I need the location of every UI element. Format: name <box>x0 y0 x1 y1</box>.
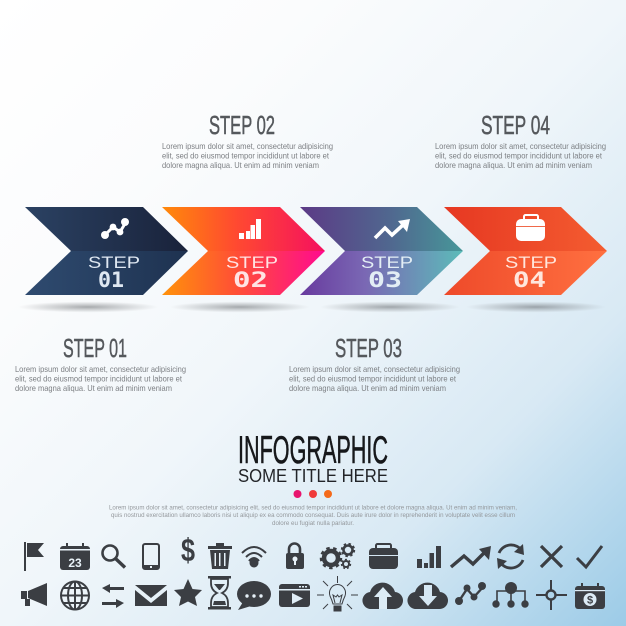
icon: sync <box>497 544 524 569</box>
icon: video window <box>279 584 310 607</box>
text block: step 03: STEP 03 <box>335 333 402 363</box>
icon: calendar <box>60 543 90 570</box>
icon row 2 <box>21 576 605 611</box>
subtitle: SOME TITLE HERE <box>238 466 388 486</box>
icon: close <box>541 546 562 567</box>
text block: step 04 <box>435 110 606 170</box>
step 01 chevron <box>25 207 188 295</box>
text block: step 02: STEP 02 <box>209 110 275 140</box>
step 02 chevron <box>162 207 325 295</box>
icon: trend arrow <box>451 546 491 567</box>
text block: step 02 <box>162 110 333 170</box>
icon: star <box>174 579 202 606</box>
text block: step 01: Lorem ipsum dolor sit amet, consectetur adipisicing <box>15 364 186 374</box>
icon: light bulb <box>317 576 358 611</box>
icon: cloud upload <box>362 583 403 609</box>
text block: step 01: dolore magna aliqua. Ut enim ad minim veniam <box>15 383 172 393</box>
text block: step 04: Lorem ipsum dolor sit amet, consectetur adipisicing <box>435 141 606 151</box>
icon: signal bars <box>417 546 441 568</box>
step 03 label <box>361 253 413 292</box>
text block: step 02: Lorem ipsum dolor sit amet, consectetur adipisicing <box>162 141 333 151</box>
text block: step 04: dolore magna aliqua. Ut enim ad minim veniam <box>435 160 592 170</box>
text block: step 04: elit, sed do eiusmod tempor incididunt ut labore et <box>435 150 603 160</box>
icon: hourglass <box>208 576 231 610</box>
step 02 label: 02 <box>233 268 268 292</box>
icon: line nodes <box>455 582 486 605</box>
step 04 label: STEP <box>505 253 557 272</box>
text block: step 02: elit, sed do eiusmod tempor incididunt ut labore et <box>162 150 330 160</box>
icon: line nodes <box>101 218 129 239</box>
step 01 label <box>88 253 140 292</box>
icon: dollar: $ <box>181 532 195 568</box>
description text: Lorem ipsum dolor sit amet, consectetur adipisicing elit, sed do eiusmod tempor incididunt ut labore et dolore magna aliqua. Ut enim ad minim veniam, <box>109 504 517 512</box>
icon: crosshair <box>536 580 567 610</box>
icon: calendar: 23 <box>68 556 82 570</box>
step 03 label: STEP <box>361 253 413 272</box>
step 03 label: 03 <box>368 268 402 292</box>
icon: globe <box>61 581 89 610</box>
icon: briefcase <box>516 215 545 241</box>
icon row 1 <box>24 532 602 571</box>
description text: dolore eu fugiat nulla pariatur. <box>272 520 354 527</box>
title: INFOGRAPHIC <box>238 429 388 472</box>
step 02 label: STEP <box>226 253 278 272</box>
icon: lock <box>286 544 304 569</box>
description text: quis nostrud exercitation ullamco laboris nisi ut aliquip ex ea commodo consequat. Duis aute irure dolor in reprehenderit in voluptate velit esse cillum <box>111 512 515 519</box>
step 01 label: 01 <box>98 268 124 292</box>
step 04 chevron <box>444 207 607 295</box>
arrow shadows <box>18 302 606 312</box>
icon: tablet <box>143 544 159 569</box>
icon: envelope <box>135 585 167 606</box>
icon: trend arrow <box>375 219 410 238</box>
text block: step 01 <box>15 333 186 393</box>
icon: gears <box>321 544 354 568</box>
icon: org chart <box>492 582 529 608</box>
text block: step 03: dolore magna aliqua. Ut enim ad minim veniam <box>289 383 446 393</box>
icon: speech bubble <box>237 581 271 610</box>
icon: megaphone <box>21 583 47 606</box>
text block: step 03: elit, sed do eiusmod tempor incididunt ut labore et <box>289 374 457 384</box>
text block: step 01: STEP 01 <box>63 333 127 363</box>
icon: flag <box>24 542 44 571</box>
text block: step 04: STEP 04 <box>481 110 550 140</box>
icon: trash <box>208 543 232 569</box>
icon: money calendar <box>575 583 605 609</box>
text block: step 03 <box>289 333 460 393</box>
decorative dots <box>294 490 332 498</box>
step 01 label: STEP <box>88 253 140 272</box>
icon: check <box>577 546 602 567</box>
step 04 label: 04 <box>513 268 546 292</box>
description text <box>109 504 517 527</box>
icon: wifi <box>242 547 266 568</box>
icon: bar chart <box>239 219 261 239</box>
step 04 label <box>505 253 557 292</box>
text block: step 01: elit, sed do eiusmod tempor incididunt ut labore et <box>15 374 183 384</box>
icon: search <box>102 546 125 568</box>
icon: transfer arrows <box>102 584 124 608</box>
icon: cloud download <box>407 583 448 609</box>
text block: step 03: Lorem ipsum dolor sit amet, consectetur adipisicing <box>289 364 460 374</box>
step 03 chevron <box>300 207 463 295</box>
text block: step 02: dolore magna aliqua. Ut enim ad minim veniam <box>162 160 319 170</box>
step 02 label <box>226 253 278 292</box>
icon: briefcase <box>369 544 398 569</box>
icon: money calendar: $ <box>587 594 593 606</box>
